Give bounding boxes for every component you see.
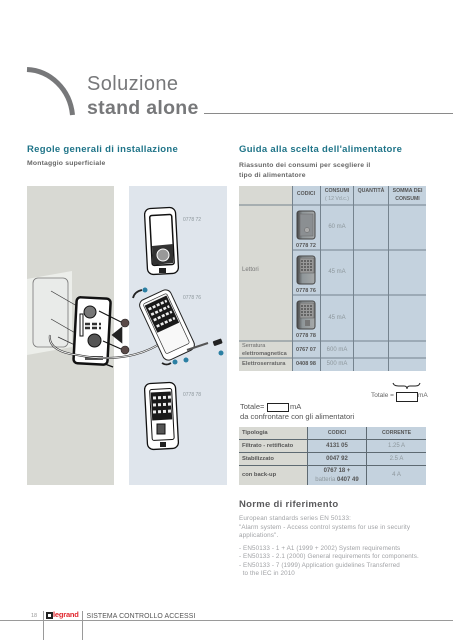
input box [396,392,418,402]
code 0778 78: 0778 78 [183,392,201,398]
table grid [239,186,426,371]
code 0408 98: 0408 98 [296,361,316,367]
title rule [204,113,453,114]
subheading: consumption summary [239,162,370,178]
subheading: consumption summary: tipo di alimentatore [239,172,306,178]
heading: installation rules: Regole generali di installazione [27,144,178,155]
row label: serratura [242,342,287,357]
header: codici: CODICI [297,191,315,197]
brace [392,382,420,389]
screws lines [51,291,77,346]
code 0778 76: 0778 76 [183,295,201,301]
text: European standards [239,515,410,539]
consumption 600 mA: 600 mA [327,347,347,353]
heading: reference standards: Norme di riferimento [239,499,338,510]
code 0767 07: 0767 07 [296,347,316,353]
total to compare: da confrontare con gli alimentatori [240,412,354,421]
keypad reader open [138,288,196,362]
header: consumi: ( 12 Vd.c.) [325,196,349,202]
row label: serratura: elettromagnetica [242,351,287,357]
code 0778 76: 0778 76 [296,288,316,294]
panel: blue readers background [129,186,227,485]
footer vertical rules [43,611,44,640]
legrand logo [46,610,79,619]
screws [99,311,129,354]
row back-up: con back-up [242,472,276,478]
code 0778 72: 0778 72 [183,217,201,223]
text: European standards: "Alarm system - Access control systems for use in security [239,524,410,530]
mounting base [73,297,111,365]
panel: grey mounting background [27,186,114,485]
title [87,73,199,119]
wall plate [27,271,72,355]
subheading: consumption summary: Riassunto dei consumi per scegliere il [239,162,370,169]
row label: serratura: Serratura [242,342,265,348]
sum total box: Totale = [371,392,394,399]
total to compare: Totale= [240,402,264,411]
consumption 500 mA: 500 mA [327,361,347,367]
logo square [46,612,53,619]
cable [50,335,158,358]
table grid [239,427,426,485]
consumption 45 mA: 45 mA [328,315,346,321]
input box [267,403,289,412]
row label: lettori: Lettori [242,267,259,273]
power supply table: 1.25 A [388,443,405,449]
header: somma: SOMMA DEI [393,188,422,194]
header: somma: CONSUMI [395,196,420,202]
page number: 18 [31,613,37,619]
title: Soluzione [87,73,178,95]
device photo 0778 72 [296,210,316,240]
reader 0778 78 drawing [144,382,180,450]
power supply table: 4 A [392,472,401,478]
consumption 45 mA: 45 mA [328,269,346,275]
first column grey [239,186,292,371]
device photo 0778 76 [296,256,316,284]
first column grey [239,427,307,485]
row label: elettroserratura: Elettroserratura [242,361,286,367]
row filtrato: Filtrato - rettificato [242,443,293,449]
power supply table: CORRENTE [382,430,411,436]
consumption 60 mA: 60 mA [328,224,346,230]
mounting diagram [27,271,224,368]
header row: Tipologia [242,430,268,436]
sum total box: mA [418,392,428,399]
title arc icon [26,67,75,116]
text: standards list: - EN50133 - 7 (1999) Application guidelines Transferred [239,562,400,569]
text: European standards: European standards series EN 50133: [239,515,351,522]
power supply table: 2.5 A [390,456,403,462]
sum total box [371,392,428,402]
header: consumi: CONSUMI [325,188,349,194]
power supply table: 4131 05 [326,443,348,449]
power supply table [239,427,426,485]
header: consumi [325,188,349,202]
text: standards list: to the IEC in 2010 [243,570,295,577]
text: standards list: - EN50133 - 1 + A1 (1999 + 2002) System requirements [239,545,400,552]
arrows and step markers [105,288,224,367]
total to compare: mA [290,402,301,411]
power supply table: CODICI [328,430,346,436]
footer title: SISTEMA CONTROLLO ACCESSI [86,613,195,620]
subheading: surface mounting: Montaggio superficiale [27,160,105,167]
total to compare [240,402,354,421]
power supply table: 0767 18 + [324,468,350,474]
header: somma [392,188,422,202]
power supply table: batteria 0407 49 [315,477,359,483]
power supply table: 0047 92 [326,456,348,462]
title: stand alone [87,97,199,119]
text: European standards: applications". [239,532,278,539]
code 0778 72: 0778 72 [296,243,316,249]
logo word: legrand [53,610,79,619]
header: quantita: QUANTITÀ [358,188,384,194]
consumption table [239,186,426,371]
heading: power supply guide: Guida alla scelta dell'alimentatore [239,144,402,155]
device photo 0778 78 [296,300,316,330]
footer rule [0,620,453,621]
code 0778 78: 0778 78 [296,333,316,339]
reader 0778 72 drawing [144,206,180,276]
row stabilizzato: Stabilizzato [242,456,274,462]
text: standards list: - EN50133 - 2.1 (2000) General requirements for components. [239,553,419,560]
text: standards list [239,545,419,577]
